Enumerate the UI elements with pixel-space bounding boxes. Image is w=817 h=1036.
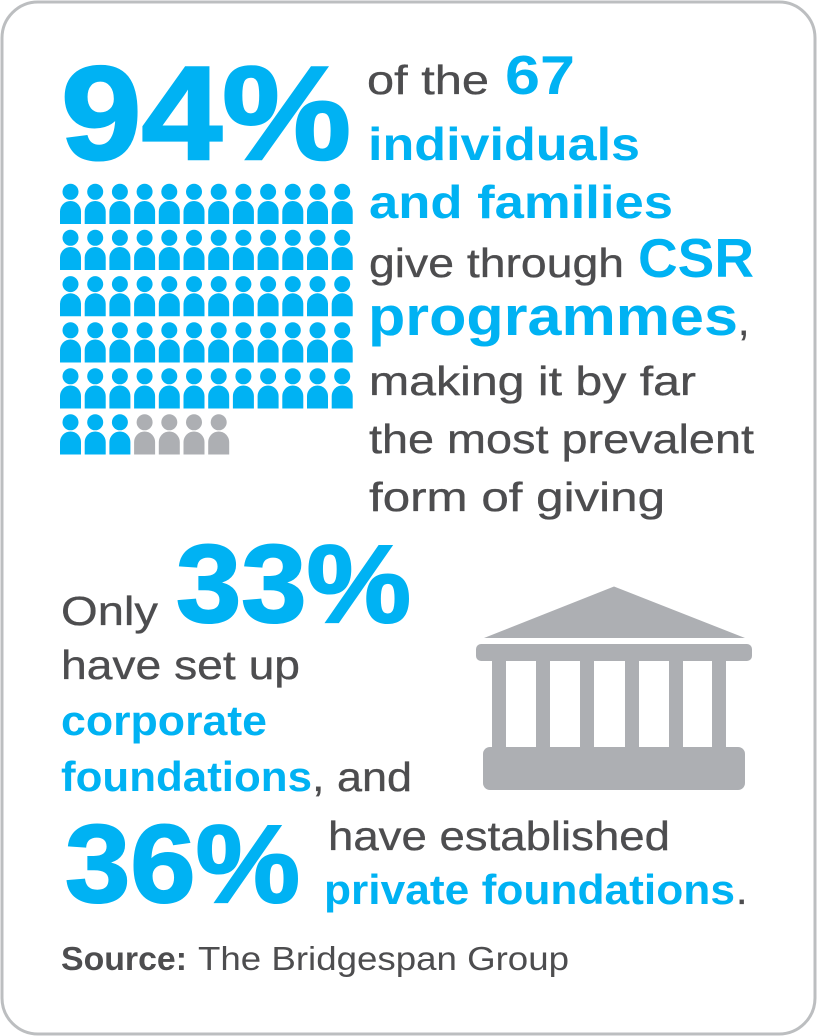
text block: CSR giving statement: 67 — [505, 44, 575, 106]
source line: Source: — [61, 940, 187, 977]
text block: CSR giving statement: CSR — [638, 227, 754, 289]
text block: corporate foundations: , and — [312, 754, 412, 800]
text block: CSR giving statement: form of giving — [369, 474, 665, 520]
text block: CSR giving statement: individuals — [368, 118, 640, 170]
pictogram: 67 people, 63 highlighted — [60, 184, 353, 455]
text block: CSR giving statement: , — [738, 298, 749, 344]
text block: CSR giving statement: making it by far — [369, 358, 696, 404]
source line: The Bridgespan Group — [198, 940, 569, 977]
stat: 36%: 36% — [65, 803, 300, 926]
text block: CSR giving statement: give through — [369, 240, 624, 286]
stat: 33%: 33% — [176, 523, 411, 646]
heading: 94%: 94% — [61, 40, 351, 188]
text block: CSR giving statement: the most prevalent — [369, 416, 755, 462]
text block: corporate foundations: foundations — [61, 753, 312, 800]
text block: private foundations: private foundations — [324, 866, 735, 913]
icon: institution building — [476, 586, 752, 790]
text block: corporate foundations: have set up — [61, 642, 300, 688]
text block: corporate foundations — [61, 523, 412, 800]
text block: private foundations — [65, 803, 747, 926]
text block: private foundations: . — [736, 867, 747, 913]
text block: CSR giving statement: and families — [369, 176, 673, 228]
text block: CSR giving statement: of the — [367, 57, 489, 103]
text block: CSR giving statement: programmes — [368, 285, 738, 347]
text block: corporate foundations: corporate — [61, 697, 267, 744]
text block: CSR giving statement — [367, 44, 755, 520]
text block: private foundations: have established — [328, 813, 670, 859]
source line — [61, 940, 569, 977]
text block: corporate foundations: Only — [61, 588, 159, 634]
